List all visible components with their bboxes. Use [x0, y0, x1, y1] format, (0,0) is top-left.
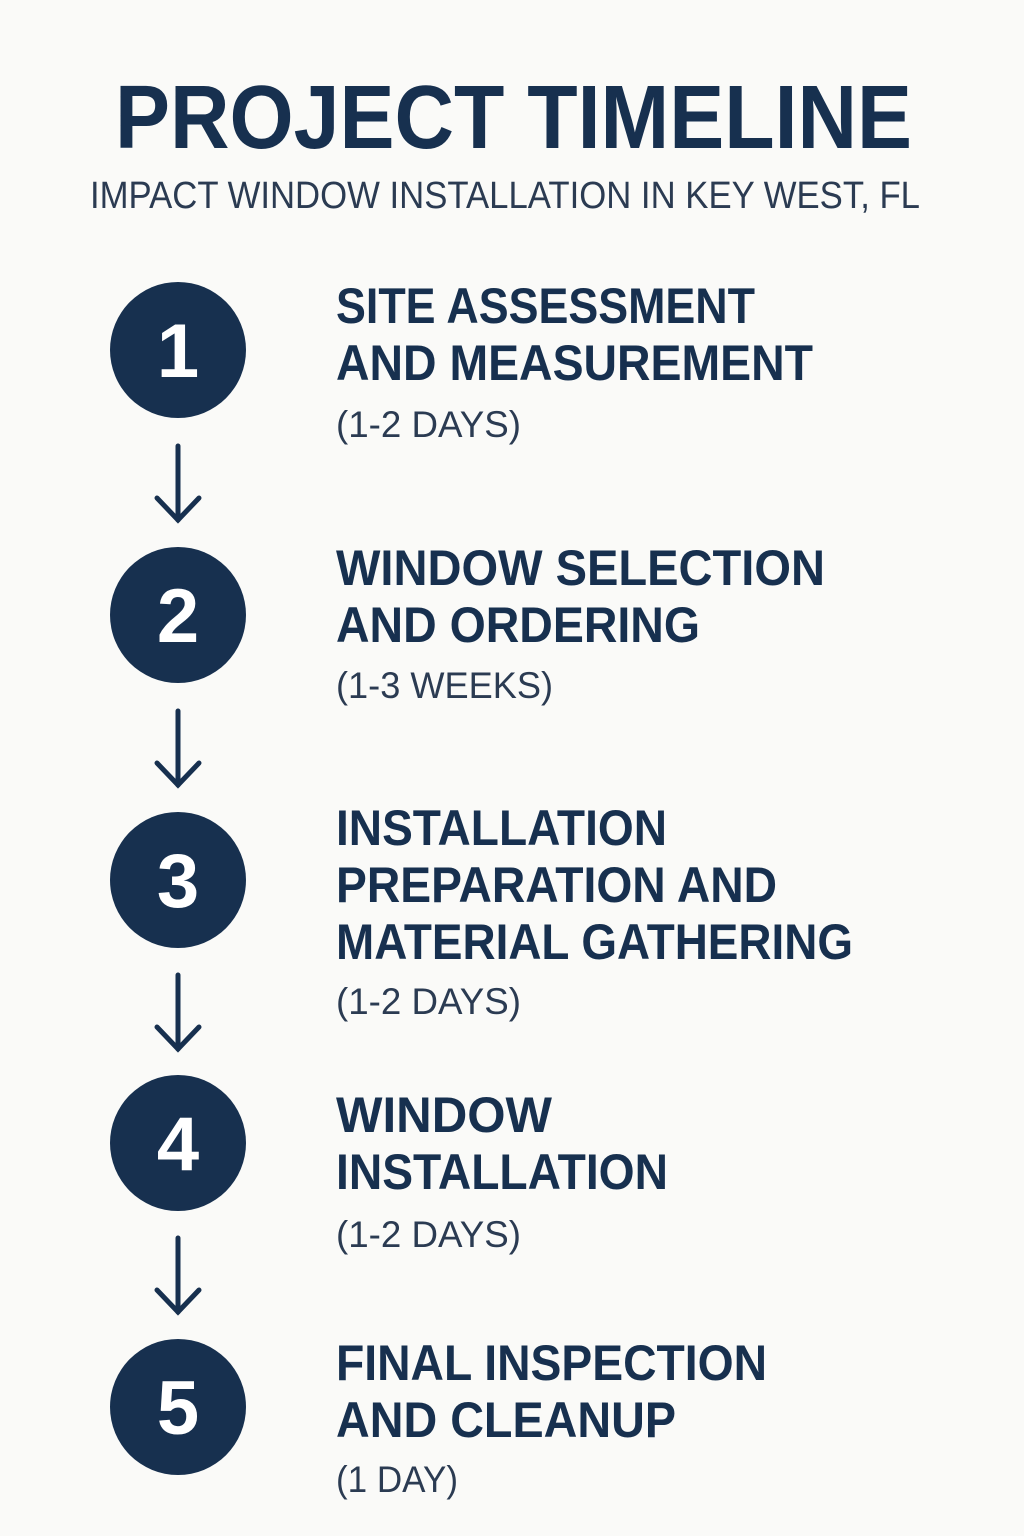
step 4 badge — [110, 1075, 246, 1211]
step 4 badge: 4 — [157, 1102, 199, 1187]
step 3 text: INSTALLATION — [336, 800, 667, 856]
step 1 text: AND MEASUREMENT — [336, 335, 813, 391]
step 1 badge: 1 — [157, 309, 199, 394]
step 4 text: INSTALLATION — [336, 1144, 668, 1200]
step 2 badge — [110, 547, 246, 683]
step 5 badge — [110, 1339, 246, 1475]
step 5 text: AND CLEANUP — [336, 1392, 676, 1448]
step 4 text: WINDOW — [336, 1087, 553, 1143]
step 3 text: MATERIAL GATHERING — [336, 914, 853, 970]
step 3 badge: 3 — [157, 839, 199, 924]
step 2 — [110, 540, 825, 706]
step 2 text: WINDOW SELECTION — [336, 540, 825, 596]
arrow 1 — [157, 446, 199, 520]
step 3 text: (1-2 DAYS) — [336, 981, 521, 1022]
step 3 — [110, 800, 853, 1022]
step 1 badge — [110, 282, 246, 418]
step 5 — [110, 1335, 767, 1500]
step 1 text — [336, 278, 813, 445]
step 1 text: SITE ASSESSMENT — [336, 278, 755, 334]
step 5 badge: 5 — [157, 1366, 199, 1451]
step 2 text: AND ORDERING — [336, 597, 700, 653]
step 1 text: (1-2 DAYS) — [336, 404, 521, 445]
title: PROJECT TIMELINE — [115, 68, 912, 168]
step 5 text — [336, 1335, 767, 1500]
step 3 text: PREPARATION AND — [336, 857, 777, 913]
arrow 2 — [157, 711, 199, 785]
step 1 — [110, 278, 813, 445]
subtitle: IMPACT WINDOW INSTALLATION IN KEY WEST, FL — [90, 175, 920, 217]
step 5 text: (1 DAY) — [336, 1459, 458, 1500]
arrow 3 — [157, 975, 199, 1049]
step 4 text — [336, 1087, 668, 1255]
step 5 text: FINAL INSPECTION — [336, 1335, 767, 1391]
step 3 text — [336, 800, 853, 1022]
step 3 badge — [110, 812, 246, 948]
arrow 4 — [157, 1238, 199, 1312]
step 4 — [110, 1075, 668, 1255]
step 2 text: (1-3 WEEKS) — [336, 665, 553, 706]
step 2 badge: 2 — [157, 574, 199, 659]
step 2 text — [336, 540, 825, 706]
step 4 text: (1-2 DAYS) — [336, 1214, 521, 1255]
